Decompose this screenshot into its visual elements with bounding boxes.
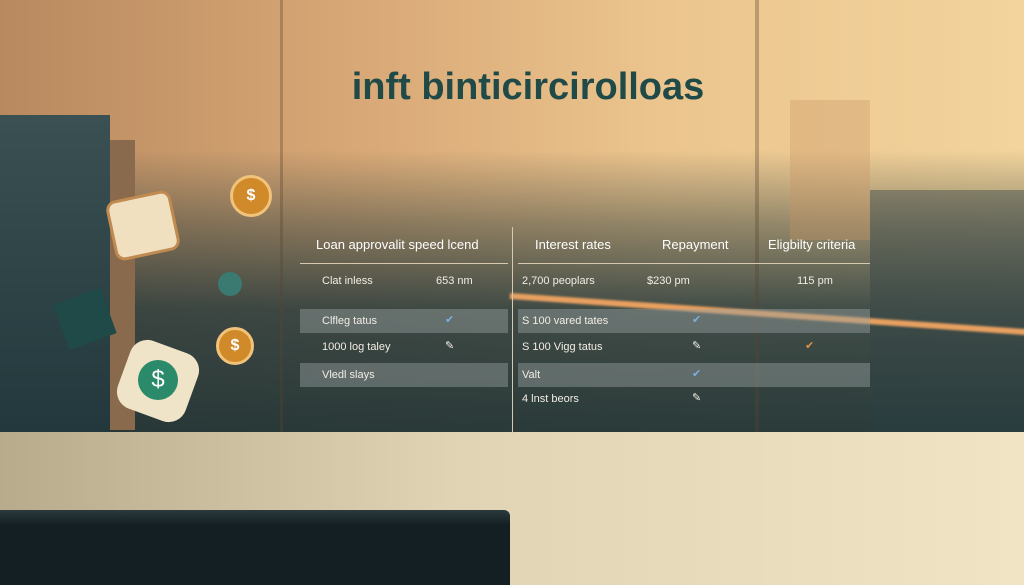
background city [0,150,1024,440]
table: Clfleg tatus [322,315,377,327]
table: Vledl slays [322,369,375,381]
table: Interest rates [535,237,611,252]
laptop [0,510,510,585]
orange railing [510,293,1024,335]
table: Eligbilty criteria [768,237,855,252]
table: Valt [522,369,540,381]
table: ✎ [692,340,701,352]
table: 653 nm [436,275,473,287]
table [300,227,870,433]
glass frames [280,0,283,440]
table: S 100 Vigg tatus [522,341,603,353]
text: $ [247,187,255,204]
text: $ [231,337,239,354]
table: ✔ [805,340,814,352]
title: inft binticircirolloas [352,66,704,108]
table: Repayment [662,237,728,252]
table: ✎ [692,392,701,404]
icons [104,189,182,262]
text: $ [151,366,165,393]
table: 1000 log taley [322,341,390,353]
table: S 100 vared tates [522,315,608,327]
table: $230 pm [647,275,690,287]
desk [0,432,1024,585]
rows: Clat inless [322,275,373,287]
table: ✔ [692,368,701,380]
table: ✔ [445,314,454,326]
headers: Loan approvalit speed lcend [316,237,479,252]
table: 2,700 peoplars [522,275,595,287]
table: 115 pm [797,275,833,287]
table: ✎ [445,340,454,352]
table: ✔ [692,314,701,326]
table: 4 lnst beors [522,393,579,405]
